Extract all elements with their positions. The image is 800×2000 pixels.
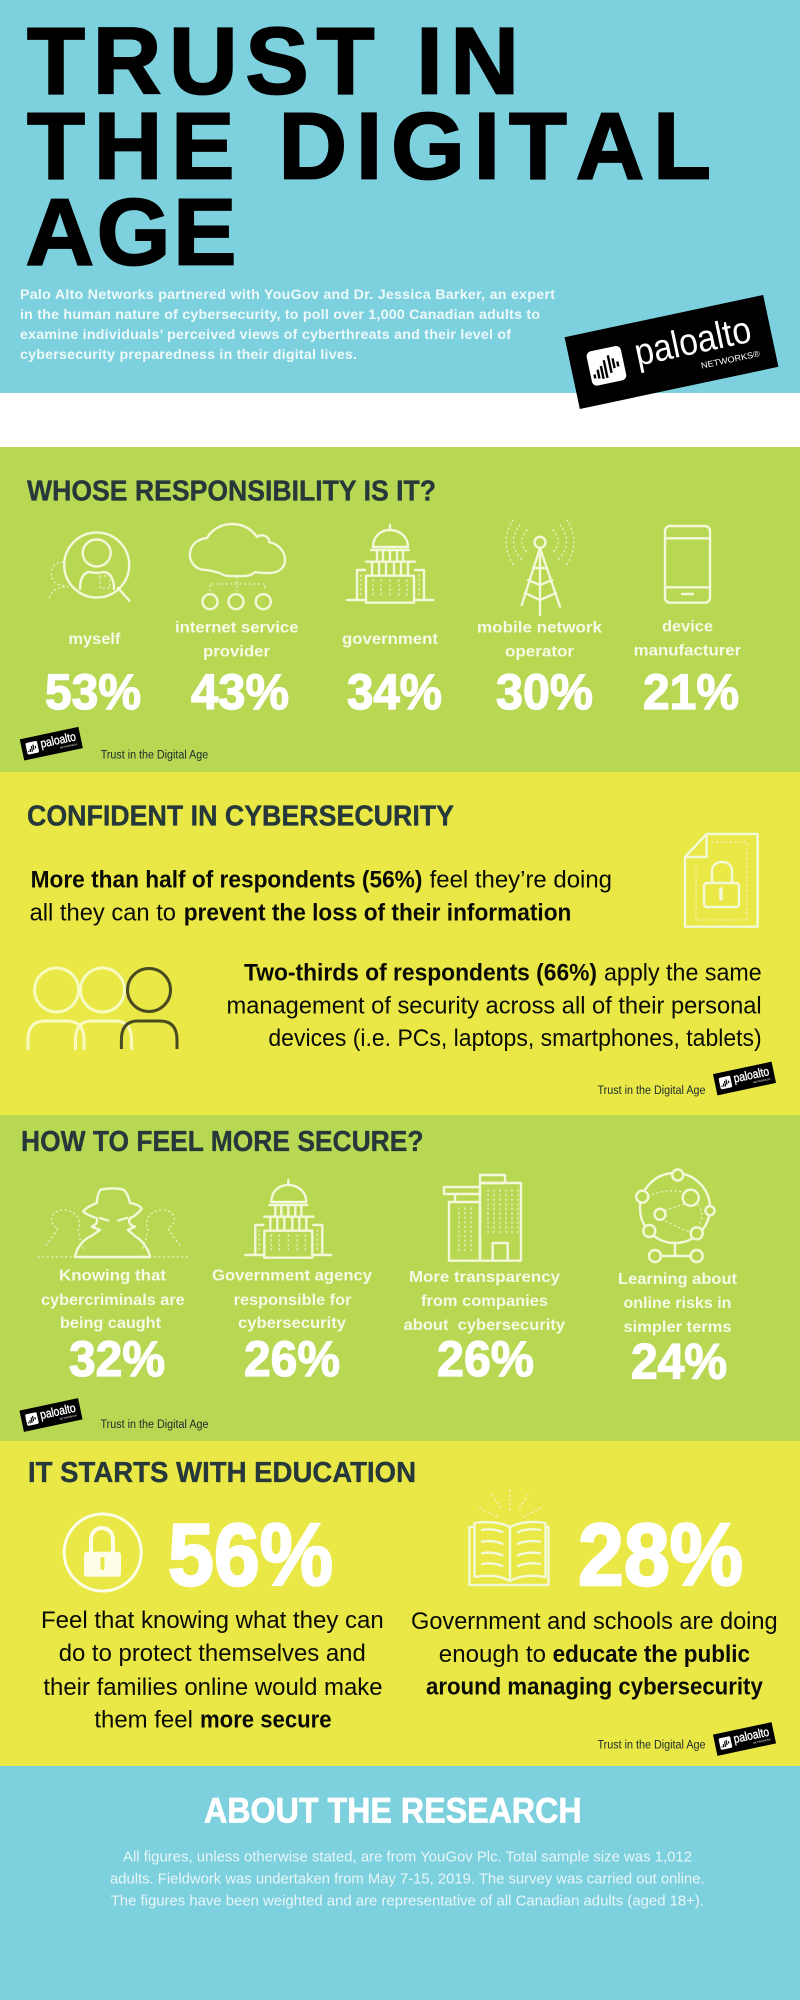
- statement: 66%: [226, 960, 762, 1052]
- column: more transparency: from companies: [421, 1293, 548, 1310]
- text: educate the public: [411, 1608, 778, 1700]
- icon: cloud network: [190, 524, 285, 609]
- column: cybercriminals: [41, 1268, 185, 1387]
- heading: HOW TO FEEL MORE SECURE?: [21, 1126, 424, 1158]
- value: 53%: 53%: [45, 664, 141, 720]
- logo: small: [19, 1398, 83, 1432]
- panel: about the research: [0, 1766, 800, 2000]
- icon: network globe: [636, 1170, 714, 1262]
- icon: locked document: [685, 834, 758, 927]
- text: educate the public: Government and schools are doing: [411, 1608, 778, 1635]
- text: feel more secure: their families online would make: [43, 1674, 383, 1701]
- logo: small: paloalto: [39, 730, 77, 751]
- column: online risks: online risks in: [624, 1295, 732, 1312]
- statement: 66%: management of security across all of their personal: [226, 992, 762, 1019]
- research note: adults. Fieldwork was undertaken from May 7-15, 2019. The survey was carried out online.: [110, 1871, 705, 1888]
- heading: WHOSE RESPONSIBILITY IS IT?: [27, 476, 436, 508]
- statement: 56%: [30, 866, 612, 927]
- text: educate the public: around managing cybersecurity: [426, 1673, 763, 1700]
- title: AGE: [26, 180, 236, 286]
- label: device manufacturer: manufacturer: [634, 643, 741, 660]
- text: feel more secure: them feel: [94, 1707, 193, 1734]
- text: feel more secure: Feel that knowing what they can: [41, 1607, 384, 1634]
- value: 28%: 28%: [578, 1505, 743, 1604]
- column: cybercriminals: 32%: [69, 1331, 165, 1387]
- logo: small: [713, 1062, 776, 1095]
- logo: small: paloalto: [732, 1725, 770, 1746]
- statement: 56%: More than half of respondents (56%): [31, 866, 422, 893]
- logo: small: paloalto: [39, 1401, 77, 1422]
- logo: small: [20, 727, 83, 761]
- logo: small: [713, 1722, 776, 1756]
- intro text: [20, 287, 555, 363]
- statement: 56%: all they can to: [30, 900, 176, 927]
- column: more transparency: 26%: [437, 1331, 534, 1387]
- heading: IT STARTS WITH EDUCATION: [28, 1457, 416, 1489]
- panel: confident in cybersecurity: [0, 772, 800, 1115]
- label: mobile network operator: mobile network: [477, 620, 602, 637]
- text: feel more secure: do to protect themselves and: [59, 1640, 366, 1667]
- value: 30%: 30%: [496, 664, 593, 720]
- intro text: Palo Alto Networks partnered with YouGov and Dr. Jessica Barker, an expert: [20, 287, 555, 303]
- statement: 66%: devices (i.e. PCs, laptops, smartphones, tablets): [268, 1025, 762, 1052]
- column: more transparency: about cybersecurity: [404, 1317, 565, 1334]
- research note: All figures, unless otherwise stated, are from YouGov Plc. Total sample size was 1,012: [123, 1849, 692, 1866]
- icon: mobile tower: [506, 520, 574, 615]
- logo: Palo Alto Networks large: NETWORKS®: [700, 348, 761, 371]
- icon: hacker: [38, 1188, 188, 1257]
- statement: 66%: apply the same: [604, 960, 762, 987]
- column: online risks: simpler terms: [624, 1319, 732, 1336]
- heading: ABOUT THE RESEARCH: [204, 1792, 582, 1831]
- logo: small: NETWORKS®: [753, 1738, 771, 1745]
- icon: person in magnifier: [49, 532, 129, 601]
- logo: small: paloalto: [732, 1064, 770, 1086]
- panel: header: [0, 0, 800, 393]
- icon: office buildings: [444, 1175, 521, 1261]
- label: myself: myself: [68, 631, 121, 648]
- label: mobile network operator: [477, 620, 602, 661]
- value: 56%: 56%: [168, 1505, 333, 1604]
- statement: 56%: prevent the loss of their information: [184, 900, 571, 927]
- research note: [110, 1849, 705, 1910]
- footer tag: Trust in the Digital Age: [598, 1085, 706, 1097]
- logo: small: NETWORKS®: [59, 1414, 78, 1421]
- column: government agency: cybersecurity: [238, 1315, 346, 1332]
- column: online risks: [618, 1271, 738, 1390]
- intro text: examine individuals’ perceived views of cyberthreats and their level of: [20, 327, 511, 343]
- panel: it starts with education: [0, 1441, 800, 1766]
- statement: 56%: feel they’re doing: [430, 866, 612, 893]
- value: 21%: 21%: [643, 664, 739, 720]
- icon: government building: [347, 525, 433, 603]
- label: internet service provider: [175, 620, 299, 661]
- icon: smartphone: [665, 526, 710, 603]
- column: government agency: [212, 1268, 372, 1387]
- statement: 66%: Two-thirds of respondents (66%): [244, 960, 597, 987]
- column: online risks: Learning about: [618, 1271, 738, 1288]
- title: THE DIGITAL: [27, 94, 711, 200]
- icon: padlock in circle: [64, 1514, 141, 1591]
- column: government agency: responsible for: [234, 1292, 352, 1309]
- column: cybercriminals: being caught: [60, 1315, 162, 1332]
- label: internet service provider: provider: [203, 644, 270, 661]
- column: cybercriminals: Knowing that: [59, 1268, 167, 1285]
- text: educate the public: enough to: [439, 1641, 546, 1668]
- label: mobile network operator: operator: [505, 644, 574, 661]
- text: feel more secure: [41, 1607, 384, 1734]
- label: device manufacturer: [634, 619, 741, 660]
- panel: how to feel more secure: [0, 1115, 800, 1441]
- title: TRUST IN: [27, 8, 519, 114]
- logo: Palo Alto Networks large: [565, 295, 778, 409]
- logo: Palo Alto Networks large: paloalto: [631, 309, 755, 375]
- intro text: cybersecurity preparedness in their digital lives.: [20, 347, 357, 363]
- footer tag: Trust in the Digital Age: [598, 1740, 706, 1752]
- icon: government building: [245, 1180, 331, 1258]
- logo: small: NETWORKS®: [753, 1078, 771, 1084]
- value: 34%: 34%: [347, 664, 442, 720]
- column: more transparency: [404, 1269, 565, 1387]
- footer tag: Trust in the Digital Age: [100, 1419, 208, 1431]
- label: internet service provider: internet service: [175, 620, 299, 637]
- logo: small: NETWORKS®: [60, 743, 78, 750]
- column: cybercriminals: cybercriminals are: [41, 1292, 185, 1309]
- heading: CONFIDENT IN CYBERSECURITY: [27, 800, 454, 832]
- label: government: government: [342, 631, 439, 648]
- text: feel more secure: more secure: [200, 1707, 332, 1734]
- footer tag: Trust in the Digital Age: [101, 750, 208, 762]
- title: [26, 8, 711, 286]
- column: online risks: 24%: [631, 1334, 727, 1390]
- column: government agency: 26%: [244, 1331, 340, 1387]
- text: educate the public: educate the public: [553, 1641, 750, 1668]
- column: government agency: Government agency: [212, 1268, 372, 1285]
- icon: three people: [28, 968, 177, 1050]
- value: 43%: 43%: [191, 664, 289, 720]
- panel: whose responsibility is it: [0, 447, 800, 772]
- icon: open book: [469, 1490, 548, 1585]
- column: more transparency: More transparency: [409, 1269, 560, 1286]
- intro text: in the human nature of cybersecurity, to poll over 1,000 Canadian adults to: [20, 307, 540, 323]
- label: device manufacturer: device: [662, 619, 713, 636]
- research note: The figures have been weighted and are representative of all Canadian adults (aged 18+).: [111, 1893, 704, 1910]
